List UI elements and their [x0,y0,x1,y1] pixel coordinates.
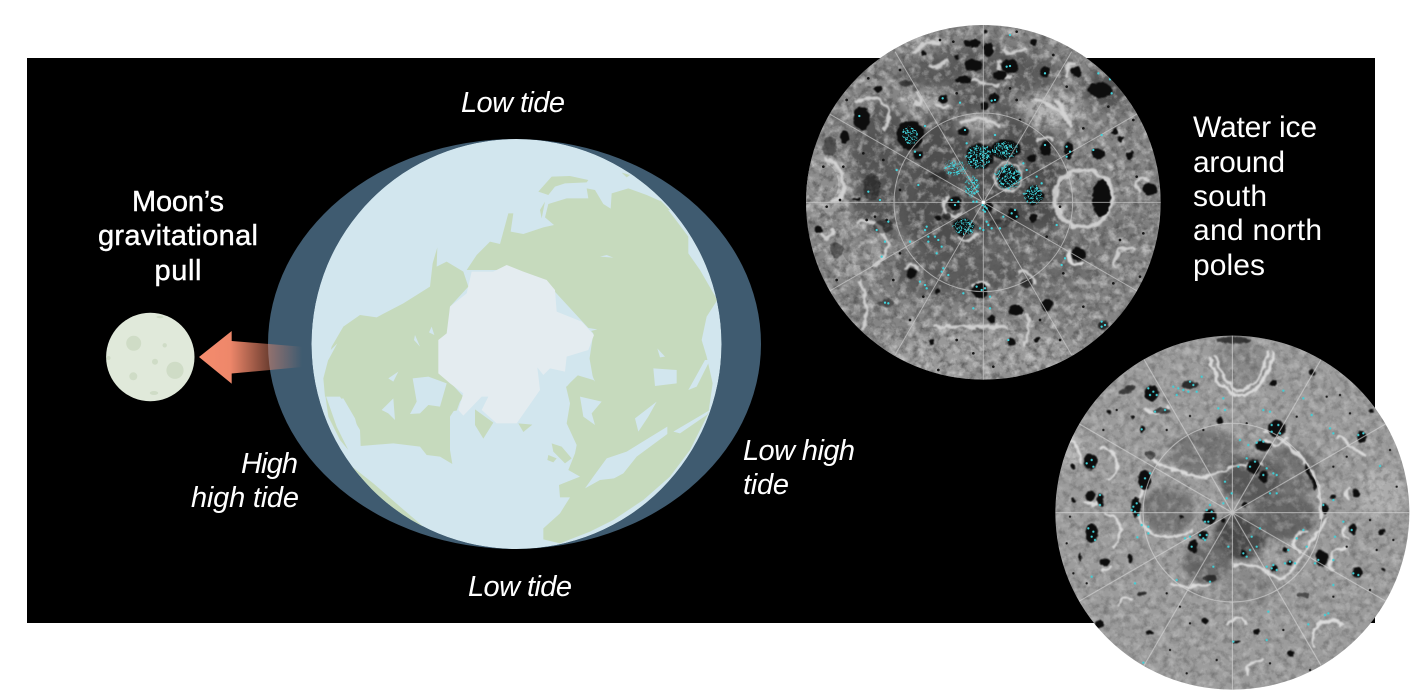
label: low tide top: Low tide [461,87,565,119]
moon illustration [106,313,194,401]
polar ice cap [438,265,594,423]
seas and lakes [326,255,717,488]
shadowed crater floors [1070,337,1385,657]
heading: moon's gravitational pull: gravitational [98,220,258,252]
label: low high tide: Low high [743,435,855,467]
text: water ice around south and north poles: Water ice [1193,111,1317,144]
small pits [1067,395,1397,673]
small pits [823,32,1143,370]
dense water ice clusters [902,127,1043,235]
tidal bulge ellipse [268,139,761,549]
scattered water ice deposits [859,35,1112,340]
text: water ice around south and north poles: south [1193,180,1267,213]
label: high high tide [191,448,299,514]
text: water ice around south and north poles [1193,111,1322,282]
shadowed crater floors [815,30,1158,345]
label: low high tide: tide [743,469,789,501]
crater rims [1063,350,1367,677]
heading: moon's gravitational pull: pull [154,255,202,287]
Landmass left [323,247,468,464]
big flat craters [1056,178,1072,217]
lunar map: first pole [800,20,1170,385]
earth globe [312,139,722,549]
arrow: gravitational pull toward moon [199,331,302,384]
text: water ice around south and north poles: around [1193,146,1285,179]
label: low high tide [743,435,855,501]
water ice deposits [1087,377,1380,663]
label: low tide bottom: Low tide [468,571,572,603]
label: high high tide: high tide [191,482,299,514]
text: water ice around south and north poles: and north [1193,214,1322,247]
dark central region and light terrain [802,30,1157,377]
graticule [805,23,1162,382]
dark basins and interior terrain [1057,337,1407,607]
crater rims [820,43,1150,347]
lunar map: second pole [1050,330,1420,695]
graticule [1055,335,1410,690]
heading: moon's gravitational pull [98,186,258,287]
text: water ice around south and north poles: poles [1193,249,1265,282]
black background panel [27,58,1375,623]
heading: moon's gravitational pull: Moon’s [132,186,224,218]
Landmass right [467,188,717,543]
polar highlight [982,201,985,204]
label: high high tide: High [241,448,298,480]
earth with tidal bulge [268,139,761,549]
